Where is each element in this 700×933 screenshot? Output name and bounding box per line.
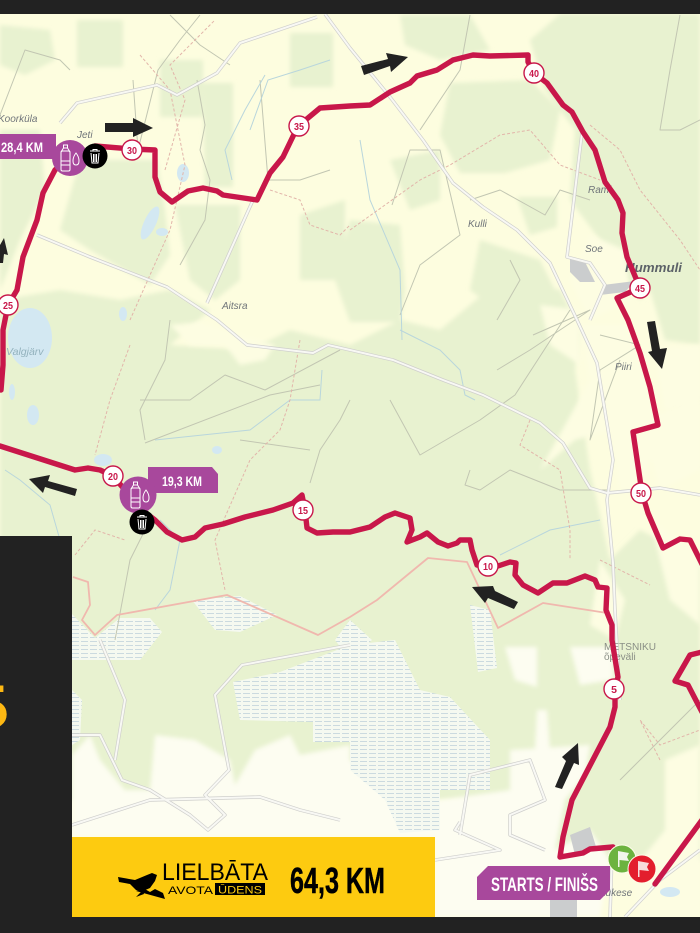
place names: Rami (588, 185, 612, 196)
aid station 28,4 km: 28,4 KM (1, 139, 43, 155)
arrow: north near start (555, 743, 579, 789)
place names: õpeväli (604, 652, 636, 663)
start and finish flags (608, 845, 656, 883)
icon: bird on branch (118, 873, 165, 899)
km 35 (289, 116, 309, 136)
bottom dark band (0, 917, 700, 933)
km 10 (478, 556, 498, 576)
distance text: 64,3 KM (290, 860, 385, 901)
start finish label (477, 866, 610, 900)
km 20 (103, 466, 123, 486)
arrow: west at km 20 (29, 475, 77, 496)
km 30: 30 (127, 145, 137, 157)
km 25 (0, 295, 18, 315)
green start flag (608, 845, 636, 873)
arrow: north-west at km 10 (472, 586, 518, 609)
aid station 28,4 km (0, 134, 108, 176)
place names: Kulli (468, 219, 488, 230)
km markers (0, 63, 651, 699)
logo: LIELBĀTA (162, 859, 268, 886)
place names: METSNIKU (604, 642, 656, 653)
white open land (72, 647, 613, 917)
lakes (8, 164, 680, 897)
direction arrows (0, 53, 667, 789)
place names: Piiri (615, 362, 632, 373)
pale clearings (170, 235, 700, 917)
left dark panel (0, 536, 72, 917)
km 40: 40 (529, 68, 539, 80)
km 40 (524, 63, 544, 83)
km 45: 45 (635, 283, 645, 295)
arrow: east near Jeti (105, 118, 153, 137)
red finish flag (628, 855, 656, 883)
km 10: 10 (483, 561, 493, 573)
logo (118, 859, 268, 899)
place names: Soe (585, 244, 603, 255)
arrow: north-east (361, 53, 408, 75)
km 20: 20 (108, 471, 118, 483)
km 15: 15 (298, 505, 308, 517)
logo: AVOTA (168, 885, 214, 897)
km 35: 35 (294, 121, 304, 133)
place names: Lūkese (600, 888, 633, 899)
km 25: 25 (3, 300, 13, 312)
place names: Jeti (76, 130, 93, 141)
village built-up areas (550, 258, 635, 917)
km 30 (122, 140, 142, 160)
bog hatching (72, 596, 497, 833)
icon: bottle and drop (131, 482, 149, 508)
place names: Valgjärv (6, 346, 44, 358)
km 5: 5 (611, 684, 617, 696)
km 50 (631, 483, 651, 503)
km 5 (604, 679, 624, 699)
pink boundary line (73, 558, 607, 635)
arrow: north at left edge (0, 238, 8, 263)
place names: Aitsra (221, 301, 248, 312)
km 50: 50 (636, 488, 646, 500)
logo: ŪDENS (218, 884, 262, 896)
top dark band (0, 0, 700, 14)
distance banner (72, 837, 435, 917)
start finish label: STARTS / FINIŠS (491, 874, 598, 896)
km 45 (630, 278, 650, 298)
icon: bin (90, 150, 100, 163)
km 15 (293, 500, 313, 520)
place names: Hummuli (625, 260, 682, 275)
aid station 19,3 km (120, 467, 218, 534)
aid station 19,3 km: 19,3 KM (162, 473, 202, 489)
icon: bin (137, 516, 147, 529)
arrow: south near Piiri (647, 321, 667, 369)
icon: bottle and drop (61, 145, 79, 171)
